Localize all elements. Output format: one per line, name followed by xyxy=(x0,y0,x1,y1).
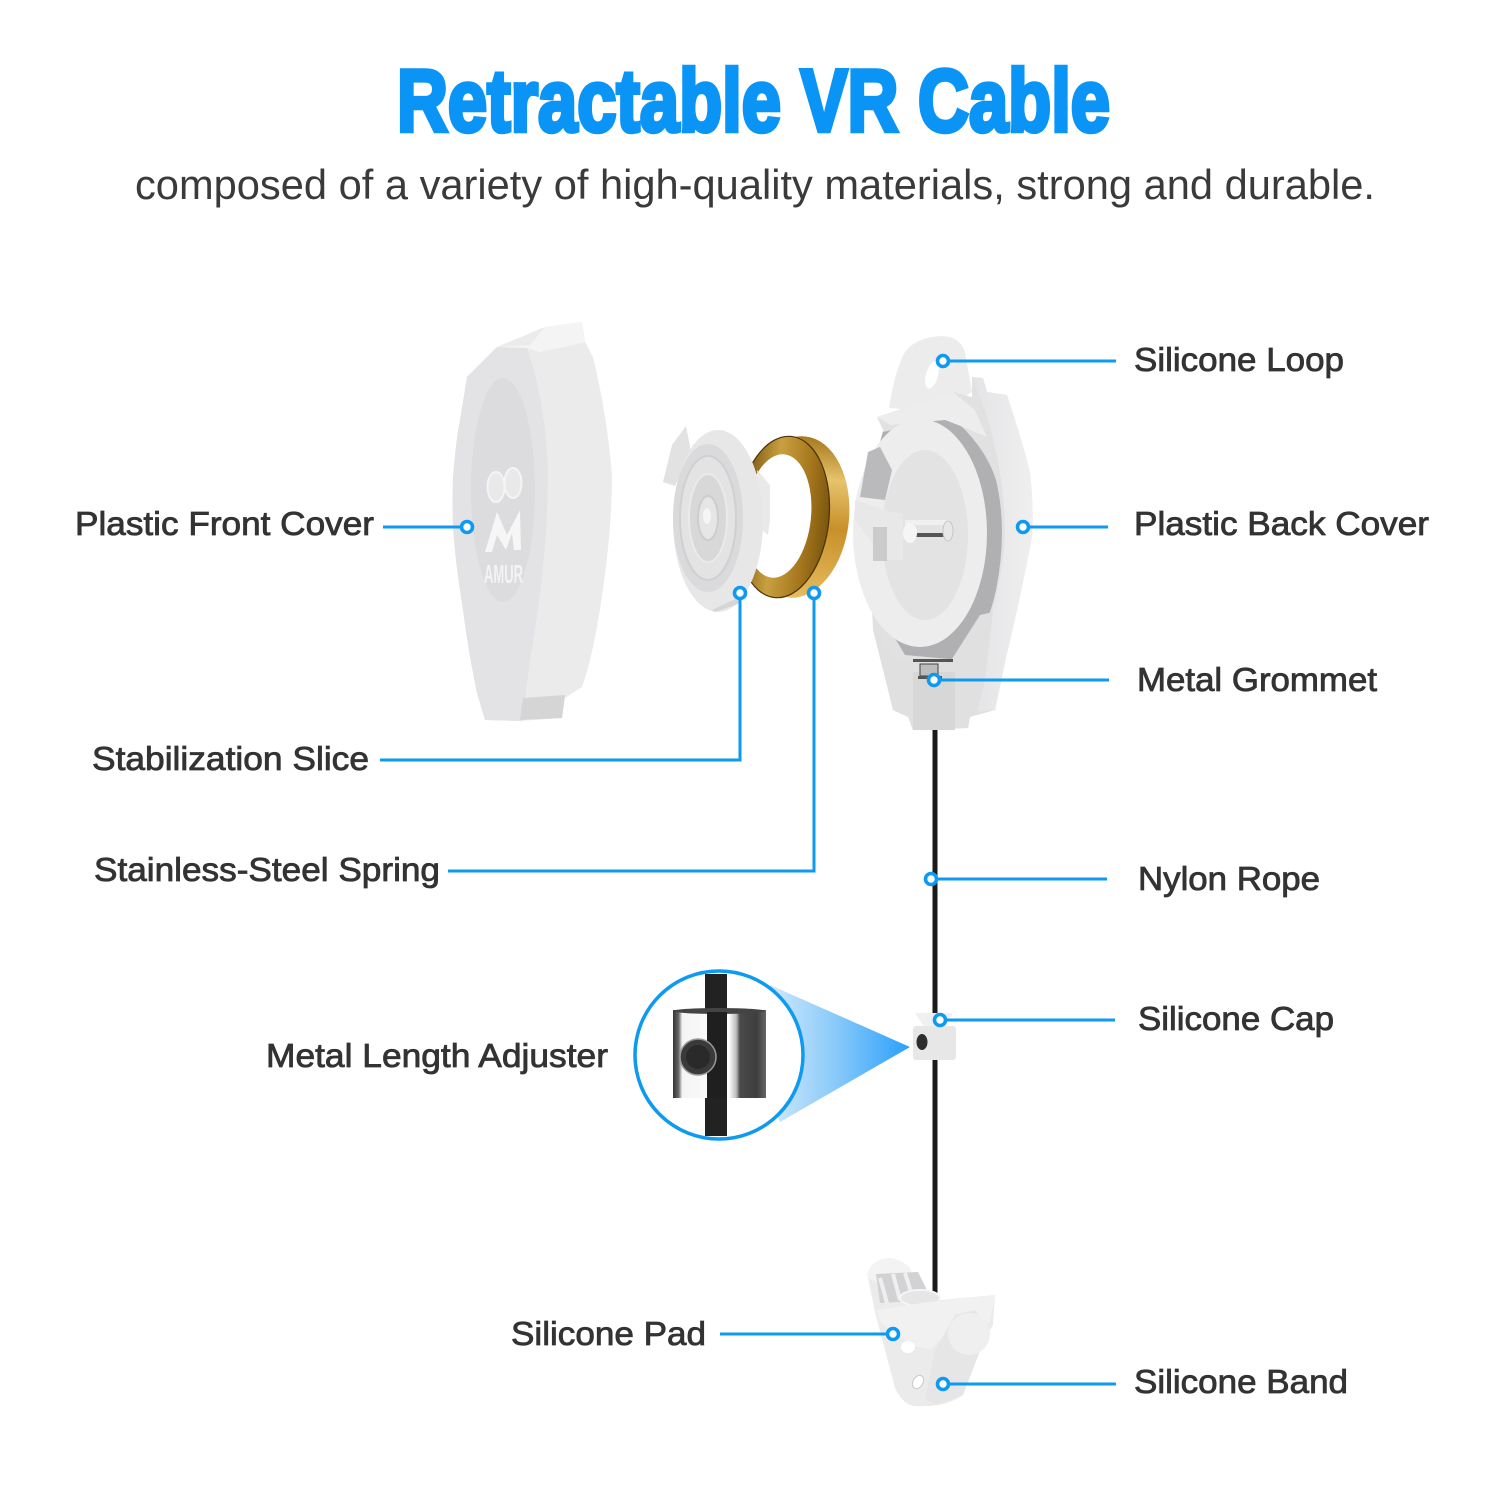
label: metal length adjuster: Metal Length Adjuster xyxy=(266,1037,608,1074)
callout: stainless-steel spring: Stainless-Steel Spring xyxy=(94,851,440,888)
part: stabilization slice xyxy=(663,426,770,612)
callout: nylon rope: Nylon Rope xyxy=(1138,860,1320,897)
callout: stabilization slice xyxy=(92,588,746,777)
callout: silicone band xyxy=(938,1363,1348,1400)
part: metal grommet xyxy=(913,659,953,679)
callout: silicone loop: Silicone Loop xyxy=(1134,341,1344,378)
part: plastic front cover xyxy=(452,322,612,721)
callout: silicone band: Silicone Band xyxy=(1134,1363,1348,1400)
callout: metal grommet xyxy=(928,661,1377,698)
nylon rope xyxy=(932,660,938,1305)
callout: plastic back cover: Plastic Back Cover xyxy=(1134,505,1429,542)
callout: plastic back cover xyxy=(1018,505,1429,542)
callout: silicone cap xyxy=(934,1000,1334,1037)
callout: plastic front cover: Plastic Front Cover xyxy=(75,505,374,542)
callout: metal grommet: Metal Grommet xyxy=(1137,661,1377,698)
callout: stainless-steel spring xyxy=(94,588,820,888)
part: plastic front cover: AMUR xyxy=(484,559,523,589)
callout: nylon rope xyxy=(926,860,1320,897)
callouts xyxy=(75,341,1429,1400)
callout: stabilization slice: Stabilization Slice xyxy=(92,740,369,777)
title: Retractable VR Cable xyxy=(397,51,1110,150)
subtitle: composed of a variety of high-quality materials, strong and durable. xyxy=(135,161,1375,208)
magnified metal length adjuster xyxy=(635,971,803,1139)
part: plastic back cover xyxy=(853,336,1033,730)
callout: silicone pad: Silicone Pad xyxy=(511,1315,706,1352)
part: silicone cap xyxy=(913,1013,956,1060)
part: silicone pad and band xyxy=(867,1258,995,1406)
callout: silicone pad xyxy=(511,1315,898,1352)
callout: silicone loop xyxy=(938,341,1344,378)
zoom beam xyxy=(770,985,910,1122)
part: stainless-steel spring xyxy=(729,431,857,603)
callout: silicone cap: Silicone Cap xyxy=(1138,1000,1334,1037)
